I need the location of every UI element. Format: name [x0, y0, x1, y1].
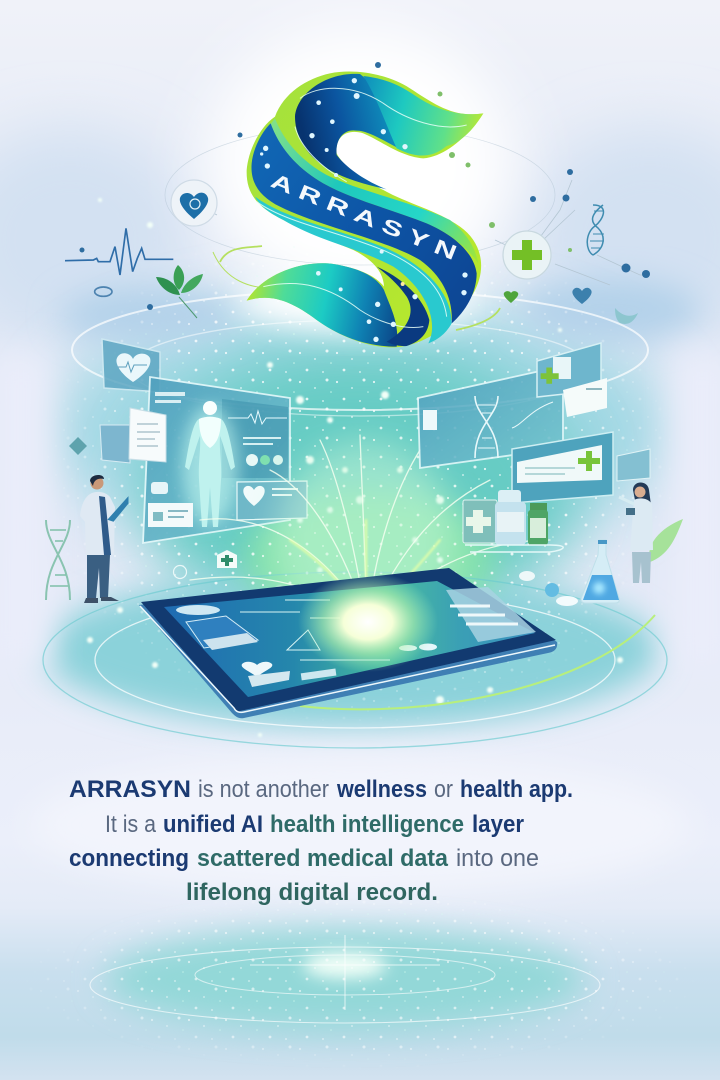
left data panels	[69, 339, 307, 578]
card with green cross	[541, 368, 607, 417]
bowl	[377, 267, 429, 346]
line 3: into one	[456, 845, 539, 872]
small tag panel	[617, 449, 650, 481]
ribbon base	[247, 71, 483, 347]
line 2: health intelligence	[270, 811, 464, 838]
icon: green leaves	[156, 265, 203, 318]
side screen	[100, 425, 130, 463]
dna panel	[418, 366, 563, 468]
shelf ring	[465, 545, 563, 552]
orbit rings	[43, 125, 667, 1023]
cross box	[463, 500, 497, 543]
ecg trace	[228, 411, 287, 424]
document	[129, 408, 166, 462]
ribbon dots	[260, 78, 468, 342]
main body panel	[143, 377, 290, 543]
icon: timer ring	[174, 566, 186, 578]
white pill bottle	[495, 490, 526, 545]
line 2: unified AI	[163, 811, 263, 838]
icon: green cross circle	[503, 231, 551, 279]
light rays	[190, 435, 550, 640]
icon: medical hexagon	[217, 550, 237, 568]
top info panel	[537, 343, 601, 397]
line 1: or	[434, 776, 453, 803]
leaf behind doctor	[649, 519, 683, 562]
heart panel	[102, 339, 160, 392]
line 1: ARRASYN	[69, 776, 191, 803]
screen widgets	[176, 587, 536, 687]
line 3: scattered medical data	[197, 845, 448, 872]
green swooshes	[213, 246, 500, 330]
line 4: lifelong digital record.	[186, 879, 438, 906]
icon: small hearts and leaf	[504, 288, 638, 324]
monitor panel	[512, 432, 613, 503]
icon: diamond	[69, 437, 87, 455]
description text	[69, 776, 573, 906]
logo wordmark: ARRASYN	[268, 169, 467, 267]
lower stripe	[255, 197, 452, 343]
line 2: It is a	[105, 811, 156, 838]
data network nodes	[80, 62, 650, 310]
dna strand left	[46, 520, 70, 600]
icon: dna helix	[587, 205, 604, 255]
upper stripe	[270, 118, 478, 263]
female doctor	[619, 482, 653, 583]
tablet screen	[164, 581, 535, 697]
line 2: layer	[472, 811, 524, 838]
dna helix	[475, 396, 498, 458]
line 3	[69, 845, 539, 872]
glow core	[298, 572, 438, 672]
top teal band	[363, 76, 483, 156]
ecg line	[65, 228, 173, 296]
icon: heart circle	[171, 180, 217, 226]
dark arch	[295, 74, 397, 189]
main blue band	[251, 123, 477, 323]
flask and capsules	[519, 540, 619, 606]
ribbon highlights	[257, 88, 467, 328]
sparkle field	[48, 198, 671, 1056]
ring marker	[95, 287, 112, 296]
line 1: health app.	[460, 776, 573, 803]
right data panels	[418, 343, 650, 552]
line 2	[105, 811, 524, 838]
tablet body	[139, 570, 557, 718]
line 3: connecting	[69, 845, 189, 872]
green pill bottle	[528, 503, 548, 545]
tablet rim highlight	[140, 606, 555, 712]
vitals chip	[151, 482, 168, 494]
tablet	[139, 568, 557, 718]
report card	[148, 503, 193, 527]
logo	[247, 71, 483, 347]
line 1	[69, 776, 573, 803]
tail	[247, 263, 397, 347]
male doctor	[80, 475, 127, 603]
glowing body figure	[182, 401, 238, 527]
line 1: wellness	[336, 776, 427, 803]
line 1: is not another	[198, 776, 329, 803]
small heart box	[237, 481, 307, 520]
